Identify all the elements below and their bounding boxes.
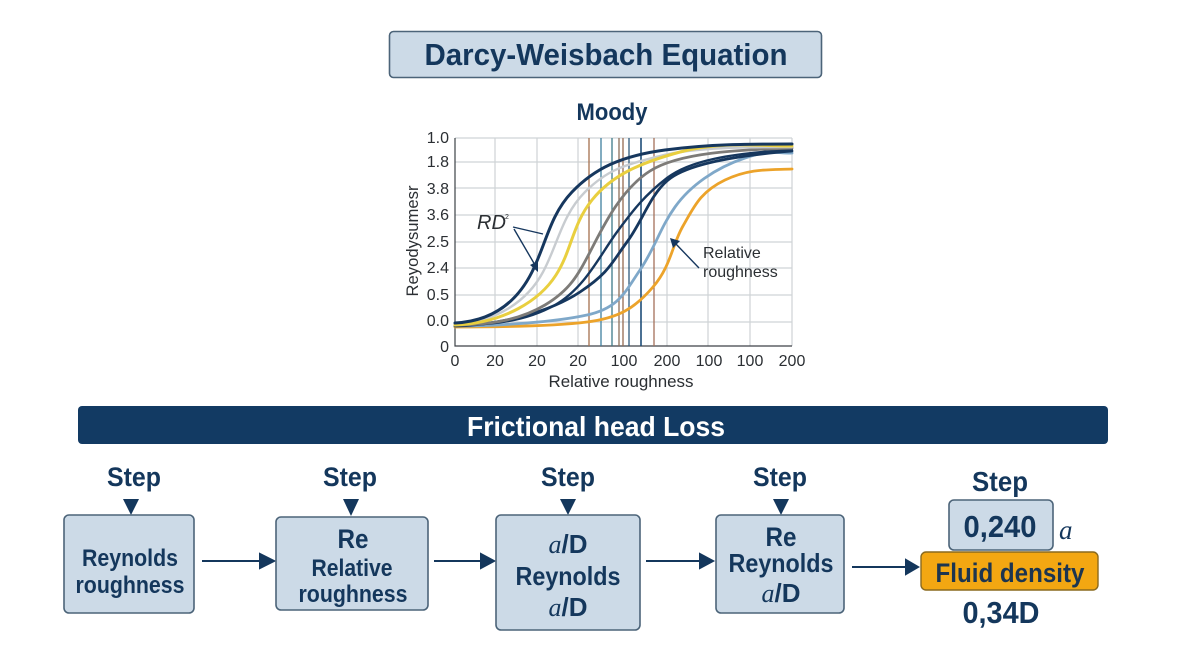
step 5: 0,34D [962,595,1040,630]
arrow 4 to 5 [852,560,918,574]
x axis ticks: 100 [696,353,722,370]
callout: RD2 [477,212,543,272]
callout: relative roughness: roughness [703,264,778,281]
step 4: a/D [762,578,800,608]
x axis ticks: 20 [528,353,546,370]
step 4 [716,462,844,613]
y axis ticks: 0.0 [427,313,449,330]
step 5: Step [972,466,1028,497]
callout: RD2: 2 [505,214,509,221]
x axis ticks: 0 [451,353,460,370]
y axis ticks: 0 [440,339,449,356]
y axis label: Reyodysumesr [404,185,422,296]
arrow 1 to 2 [202,554,274,568]
y axis ticks: 1.8 [427,154,449,171]
x axis ticks: 20 [569,353,587,370]
x axis ticks: 100 [611,353,637,370]
step 3: Step [541,462,595,492]
step 2 [276,462,428,610]
y axis ticks: 3.8 [427,181,449,198]
y axis ticks: 2.4 [427,260,449,277]
step 2: Relative [312,555,392,582]
x axis label: Relative roughness [548,372,694,391]
step 1 [64,462,194,613]
banner: frictional head loss: Frictional head Loss [467,411,725,442]
x axis ticks: 200 [654,353,680,370]
step 2: roughness [298,581,408,608]
step 5: a [1059,515,1072,545]
step 5: Fluid density [936,558,1084,588]
y axis ticks [427,130,449,356]
step 4: Re [766,522,796,552]
step 3: Reynolds [516,561,620,591]
step 5 [921,466,1098,630]
callout: relative roughness: Relative [703,245,761,262]
step 2: Step [323,462,377,492]
chart: Moody curves [404,130,805,391]
x axis ticks: 100 [737,353,763,370]
step 3: a/D [548,592,588,622]
callout: RD2: RD [477,212,506,234]
step 2: Re [338,524,368,554]
callout: relative roughness [670,238,778,281]
step 1: roughness [76,572,184,599]
arrow 2 to 3 [434,554,494,568]
step 4: Reynolds [728,548,834,578]
x axis ticks: 20 [486,353,504,370]
y axis ticks: 2.5 [427,234,449,251]
x axis ticks [451,353,805,370]
x axis ticks: 200 [779,353,805,370]
title [390,32,822,78]
step 1: Reynolds [82,545,178,572]
curves [455,144,792,327]
arrow 3 to 4 [646,554,713,568]
step 1: Step [107,462,161,492]
title: Darcy-Weisbach Equation [424,37,788,72]
chart title: Moody [576,99,648,126]
step 3: a/D [548,529,588,559]
y axis ticks: 1.0 [427,130,449,147]
step 5: 0,240 [964,509,1036,544]
y axis ticks: 3.6 [427,207,449,224]
banner: frictional head loss [78,406,1108,444]
step 4: Step [753,462,807,492]
step 3 [496,462,640,630]
y axis ticks: 0.5 [427,287,449,304]
